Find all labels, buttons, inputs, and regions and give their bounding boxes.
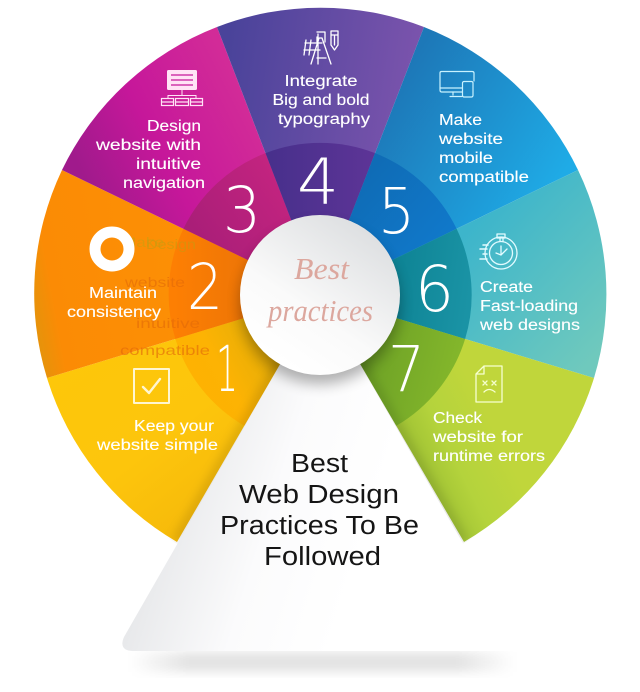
segment 1: yellow bbox=[47, 295, 320, 542]
text: segment 5: compatible bbox=[439, 169, 529, 186]
white triangle panel bbox=[122, 295, 525, 651]
icon: monitor and phone bbox=[440, 72, 474, 97]
triangle shadow on segments bbox=[172, 361, 468, 544]
text: segment 3: intuitive bbox=[136, 156, 201, 173]
inner ring 3 bbox=[183, 153, 320, 295]
text: segment 4: Big and bold bbox=[272, 92, 370, 109]
text: segment 5: Make bbox=[439, 112, 482, 129]
text: segment 3: website with bbox=[95, 137, 201, 154]
text: segment 6: web designs bbox=[479, 317, 580, 334]
segment 6: teal bbox=[320, 170, 606, 378]
text: segment 7: Check bbox=[433, 410, 482, 427]
text: segment 1: Keep your bbox=[134, 418, 214, 435]
text: segment 5: website bbox=[438, 131, 503, 148]
ghost text artefacts on the orange segment: website bbox=[124, 274, 185, 290]
inner ring 4 bbox=[266, 143, 375, 295]
heading: Best Web Design Practices To Be Followed: Best bbox=[291, 450, 348, 478]
number 7: 7 bbox=[388, 333, 425, 406]
number 1: 1 bbox=[216, 333, 238, 406]
icon: stopwatch bbox=[480, 234, 517, 269]
numerals bbox=[187, 146, 454, 406]
ghost text artefacts on the orange segment: intuitive bbox=[136, 315, 200, 331]
text: segment 7 bbox=[432, 410, 545, 465]
icon: navigation sitemap bbox=[162, 70, 202, 106]
text: segment 2: Maintain bbox=[89, 285, 157, 302]
segment 5: blue bbox=[320, 27, 578, 295]
text: segment 5: mobile bbox=[439, 150, 493, 167]
segment 4: purple bbox=[217, 8, 424, 295]
heading: Best Web Design Practices To Be Followed: Followed bbox=[264, 543, 381, 571]
ghost text artefacts on the orange segment: Design bbox=[146, 236, 196, 252]
number 5: 5 bbox=[378, 175, 415, 248]
text: segment 2 bbox=[67, 285, 161, 321]
inner ring 5 bbox=[320, 153, 457, 295]
text: segment 6: Fast-loading bbox=[480, 298, 578, 315]
icon: consistency ring bbox=[95, 232, 129, 266]
ghost text artefacts on the orange segment: Make bbox=[122, 234, 164, 250]
icon: sad error document bbox=[476, 366, 502, 402]
segment 3: magenta bbox=[62, 27, 320, 295]
text: segment 5 bbox=[438, 112, 529, 186]
heading: Best Web Design Practices To Be Followed: Practices To Be bbox=[220, 512, 419, 540]
text: segment 7: website for bbox=[432, 429, 523, 446]
text: segment 7: runtime errors bbox=[433, 448, 545, 465]
centre label: Best practices bbox=[266, 251, 373, 328]
text: segment 4: typography bbox=[278, 111, 370, 128]
inner ring 1 bbox=[175, 295, 320, 426]
text: segment 4 bbox=[272, 73, 370, 128]
segment 7: lime bbox=[320, 295, 594, 542]
centre disc bbox=[240, 215, 400, 375]
segment 2: orange bbox=[34, 170, 320, 378]
text: segment 3: Design bbox=[147, 118, 201, 135]
inner ring 2 bbox=[169, 229, 320, 339]
text: segment 6 bbox=[479, 279, 580, 334]
text: segment 1 bbox=[96, 418, 218, 454]
icon: checkbox bbox=[134, 369, 169, 403]
number 4: 4 bbox=[297, 146, 339, 219]
inner ring 7 bbox=[320, 295, 465, 426]
centre circle with drop shadow bbox=[240, 215, 400, 384]
heading: Best Web Design Practices To Be Followed: Web Design bbox=[239, 481, 399, 509]
centre shadow bbox=[240, 224, 400, 384]
ghost text artefacts on the orange segment: compatible bbox=[120, 342, 210, 358]
soft base shadow under triangle bbox=[130, 652, 515, 672]
inner ring 6 bbox=[320, 229, 472, 339]
number 2: 2 bbox=[187, 251, 223, 324]
heading: Best Web Design Practices To Be Followed bbox=[220, 450, 419, 571]
text: segment 2: consistency bbox=[67, 304, 161, 321]
number 6: 6 bbox=[415, 253, 454, 326]
ghost text artefacts on the orange segment bbox=[120, 234, 210, 358]
text: segment 1: website simple bbox=[96, 437, 218, 454]
wheel: seven coloured segments bbox=[34, 8, 606, 542]
text: segment 3: navigation bbox=[123, 175, 205, 192]
text: segment 3 bbox=[95, 118, 205, 192]
number 3: 3 bbox=[223, 174, 261, 247]
text: segment 6: Create bbox=[480, 279, 533, 296]
centre label: Best practices: Best bbox=[294, 251, 350, 286]
centre label: Best practices: practices bbox=[266, 293, 373, 328]
text: segment 4: Integrate bbox=[284, 73, 358, 90]
icon: typography A with pencil bbox=[304, 31, 338, 64]
